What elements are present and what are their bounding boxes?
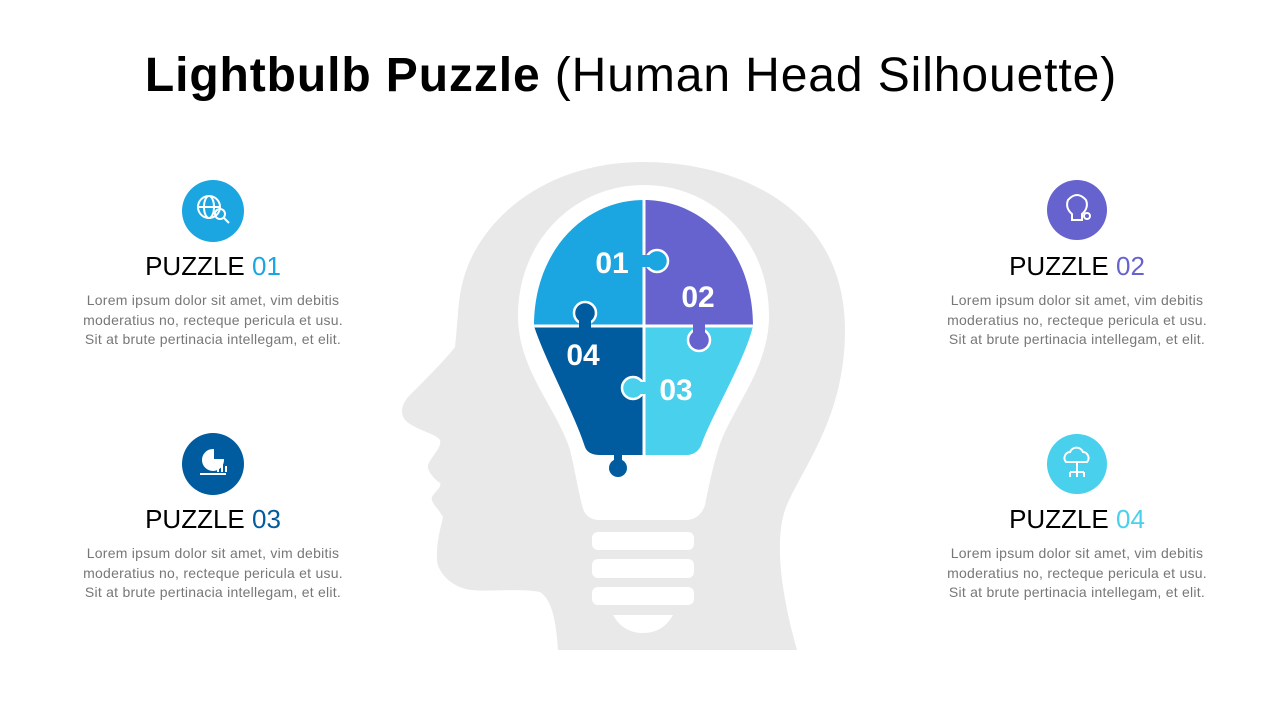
block: puzzle 01: PUZZLE 01 — [145, 251, 281, 281]
block: puzzle 03: PUZZLE 03 — [145, 504, 281, 534]
block: puzzle 02 — [947, 251, 1207, 347]
bulb outline — [518, 185, 769, 520]
block: puzzle 01: Lorem ipsum dolor sit amet, vim debitis — [87, 292, 339, 308]
block: puzzle 04: PUZZLE 04 — [1009, 504, 1145, 534]
icon circles — [182, 180, 1107, 495]
head lightbulb illustration — [182, 162, 1107, 650]
block: puzzle 03: Sit at brute pertinacia intellegam, et elit. — [85, 584, 341, 600]
piece numbers: 03 — [659, 374, 693, 407]
block: puzzle 04: Sit at brute pertinacia intellegam, et elit. — [949, 584, 1205, 600]
block: puzzle 03: moderatius no, recteque pericula et usu. — [83, 564, 343, 580]
block: puzzle 04: Lorem ipsum dolor sit amet, vim debitis — [951, 545, 1203, 561]
title: Lightbulb Puzzle (Human Head Silhouette) — [145, 49, 1117, 102]
block: puzzle 01: moderatius no, recteque pericula et usu. — [83, 312, 343, 328]
block: puzzle 02: Lorem ipsum dolor sit amet, vim debitis — [951, 292, 1203, 308]
block: puzzle 02: Sit at brute pertinacia intellegam, et elit. — [949, 331, 1205, 347]
piece numbers: 01 — [595, 247, 629, 280]
piece numbers: 04 — [566, 339, 600, 372]
head silhouette — [402, 162, 845, 650]
icon glyphs — [198, 195, 1090, 477]
block: puzzle 04: moderatius no, recteque pericula et usu. — [947, 564, 1207, 580]
block: puzzle 01 — [83, 251, 343, 347]
puzzle pieces — [534, 200, 753, 455]
block: puzzle 02: moderatius no, recteque pericula et usu. — [947, 312, 1207, 328]
block: puzzle 03 — [83, 504, 343, 600]
block: puzzle 03: Lorem ipsum dolor sit amet, vim debitis — [87, 545, 339, 561]
block: puzzle 04 — [947, 504, 1207, 600]
piece numbers — [566, 247, 715, 407]
piece numbers: 02 — [681, 281, 715, 314]
block: puzzle 02: PUZZLE 02 — [1009, 251, 1145, 281]
bulb base bars — [592, 532, 694, 633]
block: puzzle 01: Sit at brute pertinacia intellegam, et elit. — [85, 331, 341, 347]
knobs — [574, 250, 710, 399]
